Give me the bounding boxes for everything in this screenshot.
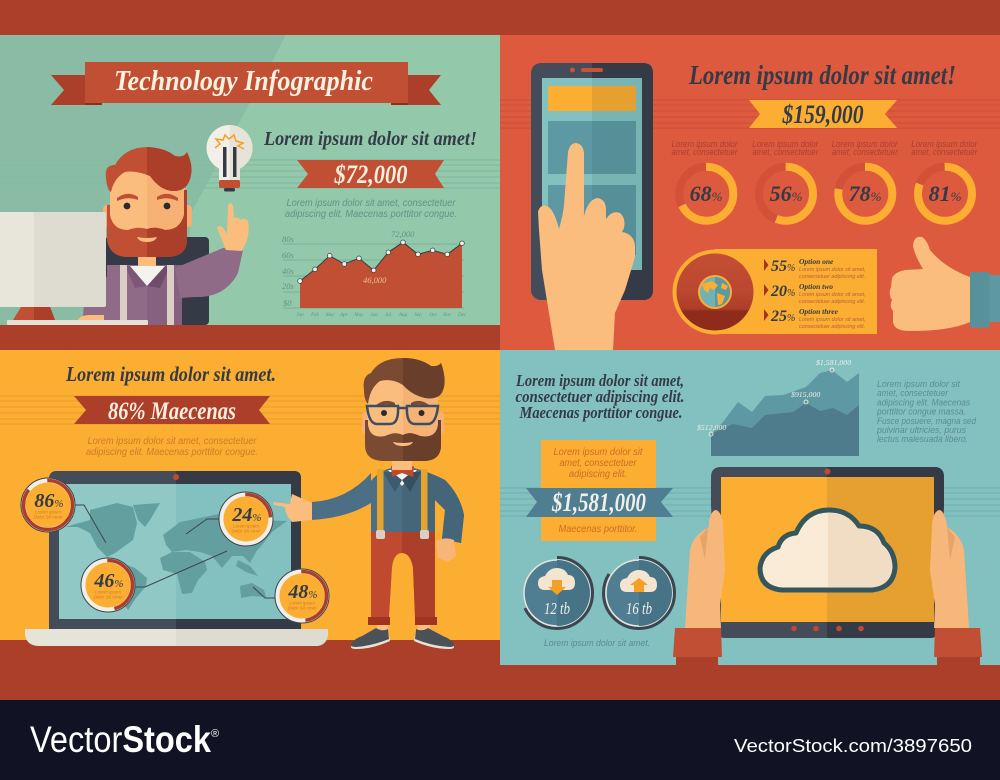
area chart: May — [354, 313, 364, 318]
person at desk — [78, 147, 249, 325]
storage badge: upload 16 tb: 16 tb — [626, 599, 652, 618]
storage badge: download 12 tb — [522, 558, 592, 628]
area chart: Oct — [429, 313, 437, 318]
donut: 68%: 68% — [690, 181, 723, 206]
layered area chart: $512,000 — [697, 423, 726, 432]
trousers — [368, 532, 437, 632]
body text: Lorem ipsum dolor sit amet, consectetuer — [88, 436, 257, 447]
option rows: consectetuer adipiscing elit. — [799, 299, 865, 305]
body text: amet, consectetuer — [877, 388, 949, 398]
callout: 46%: Dolor Sit Amet — [94, 594, 123, 600]
heading: lorem ipsum: Lorem ipsum dolor sit amet! — [263, 128, 477, 150]
laptop base — [25, 629, 328, 646]
yellow info card: adipiscing elit. — [569, 469, 627, 480]
title banner — [51, 62, 441, 105]
ribbon: $1,581,000: $1,581,000 — [551, 488, 646, 517]
donut: 81%: Lorem ipsum dolor — [911, 139, 978, 149]
donut: 81%: 81% — [929, 181, 962, 206]
donut: 78%: Lorem ipsum dolor — [832, 139, 899, 149]
area chart: Jul — [385, 313, 392, 318]
laptop — [49, 471, 301, 636]
callout: 24%: Lorem ipsum — [233, 524, 259, 528]
callout: 24%: Dolor Sit Amet — [232, 528, 261, 534]
presenter with glasses — [273, 358, 464, 649]
body text: adipiscing elit. Maecenas porttitor congue. — [285, 209, 457, 220]
storage badge: upload 16 tb — [604, 558, 674, 628]
area chart: 80s — [282, 234, 294, 244]
callout: 86%: Lorem ipsum — [35, 510, 61, 514]
callout: 86%: Dolor Sit Amet — [34, 514, 63, 520]
option rows: Lorem ipsum dolor sit amet, — [799, 317, 866, 323]
layered area chart: $915,000 — [791, 390, 820, 399]
body text: adipiscing elit. Maecenas — [877, 398, 970, 408]
panel: mobile stats (orange) — [500, 35, 1000, 350]
option rows: Lorem ipsum dolor sit amet, — [799, 267, 866, 273]
panel: world map (yellow) — [0, 350, 500, 649]
heading: lorem ipsum: Lorem ipsum dolor sit amet! — [688, 60, 956, 90]
donut: 78% — [832, 139, 899, 221]
body text: porttitor congue massa. — [876, 406, 966, 416]
heading: lorem ipsum: Lorem ipsum dolor sit amet. — [65, 362, 276, 386]
area chart: 46,000 — [363, 275, 387, 285]
donut: 56%: amet, consectetuer — [752, 147, 819, 157]
callout: 48% — [275, 569, 329, 623]
callout: 48%: Dolor Sit Amet — [288, 606, 317, 610]
donut: 56% — [752, 139, 819, 221]
title banner: Technology Infographic — [114, 65, 373, 97]
callout: 48%: 48% — [287, 581, 318, 603]
option rows: 55% — [771, 258, 795, 275]
option rows: consectetuer adipiscing elit. — [799, 274, 865, 280]
area chart: Feb — [310, 313, 319, 318]
body text — [285, 198, 457, 220]
body text: pulvinar ultricies, purus — [876, 425, 966, 435]
heading: three lines — [515, 371, 684, 422]
ribbon: $72,000: $72,000 — [334, 160, 408, 189]
area chart: Mar — [325, 313, 334, 318]
donut: 68%: Lorem ipsum dolor — [672, 139, 738, 149]
yellow info card: Maecenas porttitor. — [558, 524, 638, 535]
panel: cloud storage (teal) — [500, 350, 1000, 700]
heading: three lines: consectetuer adipiscing elit. — [516, 387, 684, 406]
layered area chart — [697, 358, 859, 456]
ribbon: $72,000 — [297, 160, 444, 189]
donut: 56%: 56% — [770, 181, 803, 206]
option rows: Option one — [799, 257, 834, 266]
icon: thumbs up — [890, 237, 1000, 331]
body text: lectus malesuada libero. — [877, 434, 968, 444]
icon: globe — [698, 275, 732, 309]
options card with globe — [672, 249, 877, 334]
area chart: Dec — [457, 313, 467, 318]
head — [362, 358, 445, 470]
map connector lines — [75, 505, 276, 598]
donut: 78%: amet, consectetuer — [832, 147, 899, 157]
area chart: Jun — [370, 313, 378, 318]
right hand holding tablet — [930, 510, 982, 665]
callout: 24%: 24% — [231, 504, 262, 526]
body text: adipiscing elit. Maecenas porttitor congue. — [86, 447, 258, 458]
area chart: Jan — [296, 313, 304, 318]
area chart: Nov — [442, 313, 452, 318]
callout: 86% — [21, 478, 75, 532]
area chart: 72,000 — [391, 229, 415, 239]
callout: 86%: 86% — [34, 490, 64, 512]
area chart: Sep — [414, 313, 422, 318]
option rows — [764, 257, 866, 330]
donut: 81% — [911, 139, 978, 221]
option rows: consectetuer adipiscing elit. — [799, 324, 865, 330]
area chart: Aug — [398, 313, 408, 318]
option rows: 20% — [770, 283, 795, 300]
callout: 48%: Lorem ipsum — [289, 600, 315, 606]
icon: tapping hand — [538, 143, 635, 350]
yellow info card — [541, 440, 656, 541]
heading: three lines: Lorem ipsum dolor sit amet, — [515, 371, 684, 390]
option rows: 25% — [770, 308, 795, 325]
shoes — [351, 628, 454, 649]
jacket and arms — [311, 468, 464, 543]
callout: 46% — [81, 558, 135, 612]
area chart: $0 — [283, 298, 292, 308]
ribbon: $159,000: $159,000 — [782, 100, 864, 129]
area chart: 40s — [282, 266, 294, 276]
area chart: 60s — [282, 250, 294, 260]
tablet — [711, 467, 944, 638]
bow tie — [391, 466, 414, 477]
donut: 68% — [672, 139, 738, 221]
glasses — [367, 406, 438, 424]
donut charts — [672, 139, 978, 221]
donut: 81%: amet, consectetuer — [911, 147, 978, 157]
area chart — [282, 229, 467, 318]
registered mark: ® — [211, 728, 219, 740]
donut: 78%: 78% — [849, 181, 882, 206]
storage badge: download 12 tb: 12 tb — [544, 599, 570, 618]
world map — [65, 503, 287, 610]
body text — [876, 379, 977, 444]
caption: Lorem ipsum dolor sit amet. — [544, 638, 650, 648]
panel: desk worker (green) — [0, 35, 500, 350]
body text: Lorem ipsum dolor sit — [877, 379, 960, 389]
body text: Fusce posuere, magna sed — [877, 416, 977, 426]
option rows: Option two — [799, 282, 833, 291]
hands — [273, 494, 312, 522]
layered area chart: $1,581,000 — [816, 358, 851, 367]
body text — [86, 436, 258, 458]
option rows: Option three — [799, 307, 839, 316]
ribbon: 86% Maecenas: 86% Maecenas — [108, 398, 236, 425]
callout: 46%: Lorem ipsum — [95, 590, 121, 594]
yellow info card: amet, consectetuer — [560, 458, 637, 469]
option rows: Lorem ipsum dolor sit amet, — [799, 292, 866, 298]
image id: VectorStock.com/3897650 — [734, 735, 972, 756]
callout: 46%: 46% — [93, 570, 124, 592]
footer bar — [0, 700, 1000, 780]
donut: 68%: amet, consectetuer — [672, 147, 738, 157]
ribbon: $159,000 — [749, 100, 897, 129]
area chart: Apr — [339, 313, 348, 318]
yellow info card: Lorem ipsum dolor sit — [554, 447, 644, 458]
left hand holding tablet — [673, 510, 725, 665]
icon: cloud — [760, 510, 895, 590]
heading: three lines: Maecenas porttitor congue. — [519, 403, 682, 422]
smartphone — [531, 63, 653, 300]
donut: 56%: Lorem ipsum dolor — [752, 139, 819, 149]
body text: Lorem ipsum dolor sit amet, consectetuer — [286, 198, 456, 209]
area chart: 20s — [282, 281, 294, 291]
VectorStock logo: VectorStock — [30, 719, 211, 760]
callout: 24% — [219, 492, 273, 546]
icon: light bulb — [206, 125, 252, 192]
computer monitor — [0, 212, 148, 325]
